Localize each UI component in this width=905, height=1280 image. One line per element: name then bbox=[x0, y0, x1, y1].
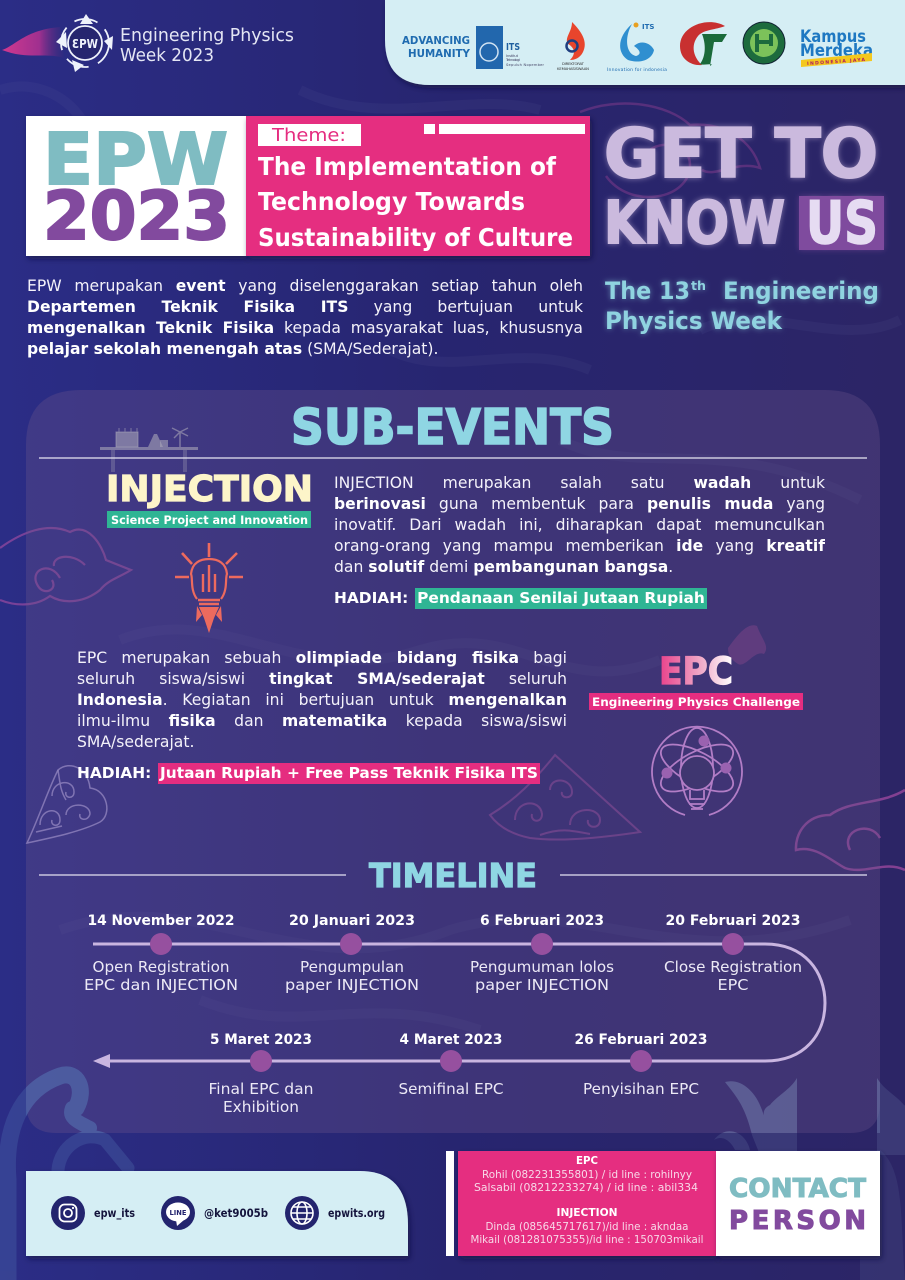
text: EPC contacts: EPC bbox=[576, 1154, 598, 1167]
icon: ITS advancing humanity logo: HUMANITY bbox=[408, 48, 470, 60]
text: theme title: Technology Towards bbox=[258, 187, 525, 216]
milestones: descriptions: Semifinal EPC bbox=[398, 1080, 504, 1098]
heading: Get to know us: GET TO bbox=[604, 115, 878, 194]
text: EPC description: SMA/sederajat. bbox=[77, 733, 194, 751]
decoration: silhouettes inside panel bbox=[7, 1075, 905, 1280]
panel: EPW 2023 title block bbox=[26, 116, 246, 256]
milestones: dates: 20 Januari 2023 bbox=[289, 913, 415, 929]
text: EPW description: mengenalkan Teknik Fisika kepada masyarakat luas, khususnya bbox=[27, 319, 583, 337]
milestones: dates: 26 Februari 2023 bbox=[574, 1032, 708, 1048]
heading: The 13th Engineering Physics Week: Engineering bbox=[723, 277, 879, 305]
text: EPC contacts: Rohil (082231355801) / id line : rohilnyy bbox=[482, 1168, 692, 1181]
callout: EPC prize: HADIAH: bbox=[77, 764, 151, 782]
icon: Direktorat Kemahasiswaan logo: KEMAHASISWAAN bbox=[557, 66, 589, 71]
milestones: dates: 14 November 2022 bbox=[88, 913, 234, 929]
milestones: dates bbox=[88, 913, 800, 1048]
milestones: descriptions: Pengumuman lolos bbox=[470, 958, 614, 976]
icon: laboratory shelf bbox=[100, 428, 198, 472]
milestones: descriptions: Open Registration bbox=[92, 958, 230, 976]
text: EPW description: Departemen Teknik Fisika ITS yang bertujuan untuk bbox=[27, 298, 583, 316]
milestones: descriptions: paper INJECTION bbox=[475, 976, 609, 994]
heading: Get to know us: US bbox=[806, 188, 878, 257]
text: INJECTION description: INJECTION merupakan salah satu wadah untuk bbox=[334, 474, 825, 492]
icon: ITS 61 logo: ITS bbox=[642, 23, 654, 31]
chart: timeline path with milestones bbox=[84, 913, 825, 1116]
heading: EPW: EPW bbox=[43, 118, 228, 201]
heading: The 13th Engineering Physics Week bbox=[605, 277, 879, 335]
icon: ITS advancing humanity logo: ADVANCING bbox=[402, 35, 470, 47]
icon: green emblem bbox=[743, 22, 785, 64]
heading: SUB-EVENTS: SUB-EVENTS bbox=[291, 399, 614, 456]
callout: EPC prize: Jutaan Rupiah + Free Pass Teknik Fisika ITS bbox=[160, 764, 538, 782]
heading: CONTACT PERSON bbox=[729, 1174, 866, 1236]
text: theme title bbox=[258, 152, 573, 252]
icon: EPW logo with swoosh: ƐPW bbox=[72, 37, 98, 51]
icon: GF logo bbox=[680, 22, 727, 66]
panel: sponsor logos bbox=[385, 0, 905, 85]
panel: contact person bbox=[446, 1151, 880, 1256]
milestones: descriptions: Final EPC dan bbox=[208, 1080, 314, 1098]
heading: TIMELINE: TIMELINE bbox=[369, 856, 537, 895]
text: INJECTION description: dan solutif demi pembangunan bangsa. bbox=[334, 558, 673, 576]
milestones: descriptions bbox=[84, 958, 802, 1116]
text: INJECTION description: inovatif. Dari wadah ini, diharapkan dapat memunculkan bbox=[334, 516, 825, 534]
icon: EPW logo with swoosh bbox=[2, 14, 113, 72]
text: INJECTION description: orang-orang yang mampu memberikan ide yang kreatif bbox=[334, 537, 825, 555]
icon: Instagram bbox=[51, 1196, 85, 1230]
callout: INJECTION prize: HADIAH: bbox=[334, 589, 408, 607]
heading: INJECTION bbox=[106, 469, 313, 528]
icon: ITS advancing humanity logo: ITS bbox=[506, 42, 520, 53]
heading: 2023: 2023 bbox=[43, 177, 230, 255]
heading: Get to know us: KNOW bbox=[604, 188, 785, 257]
heading: EPC bbox=[589, 650, 803, 710]
panel: theme bbox=[246, 116, 590, 256]
heading: INJECTION: INJECTION bbox=[106, 469, 313, 510]
milestones: descriptions: paper INJECTION bbox=[285, 976, 419, 994]
panel: sub-events and timeline background bbox=[26, 390, 880, 1133]
icon: ITS advancing humanity logo: Institut bbox=[506, 54, 519, 58]
icon: rocket light bulb bbox=[175, 543, 243, 633]
icon: Kampus Merdeka logo: Kampus bbox=[800, 27, 866, 46]
text: website: epwits.org bbox=[328, 1206, 385, 1220]
milestones: dates: 4 Maret 2023 bbox=[400, 1032, 502, 1048]
text: INJECTION description: berinovasi guna membentuk para penulis muda yang bbox=[334, 495, 825, 513]
icon: LINE: LINE bbox=[170, 1209, 187, 1217]
heading: Engineering Physics Week 2023: Week 2023 bbox=[120, 46, 214, 66]
icon: Kampus Merdeka logo: INDONESIA JAYA bbox=[807, 57, 866, 67]
text: EPW description: EPW merupakan event yang diselenggarakan setiap tahun oleh bbox=[27, 277, 583, 295]
milestones: dates: 6 Februari 2023 bbox=[480, 913, 604, 929]
callout: EPC prize bbox=[77, 763, 540, 784]
callout: INJECTION prize bbox=[334, 588, 707, 609]
text: INJECTION contacts: INJECTION bbox=[556, 1206, 618, 1219]
milestones: dates: 20 Februari 2023 bbox=[666, 913, 800, 929]
milestones: dates: 5 Maret 2023 bbox=[210, 1032, 312, 1048]
text: EPC contacts: Salsabil (08212233274) / id line : abil334 bbox=[474, 1181, 698, 1194]
panel: social media bbox=[26, 1171, 408, 1256]
arrow: timeline line bbox=[93, 944, 825, 1068]
text: INJECTION contacts bbox=[470, 1206, 704, 1246]
milestones: descriptions: Exhibition bbox=[223, 1098, 299, 1116]
text: EPC description: Indonesia. Kegiatan ini bertujuan untuk mengenalkan bbox=[77, 691, 567, 709]
milestones: descriptions: EPC bbox=[718, 976, 748, 994]
icon: ITS advancing humanity logo: Sepuluh Nopember bbox=[506, 63, 545, 67]
text: INJECTION contacts: Dinda (085645717617)/id line : akndaa bbox=[486, 1220, 688, 1233]
panel: theme: Theme: bbox=[271, 125, 346, 146]
milestones: dots bbox=[150, 933, 744, 1072]
heading: CONTACT PERSON: PERSON bbox=[729, 1206, 866, 1236]
label: Engineering Physics Challenge: Engineering Physics Challenge bbox=[592, 695, 800, 709]
heading: Engineering Physics Week 2023: Engineering Physics bbox=[120, 26, 294, 46]
text: Instagram handle: epw_its bbox=[94, 1206, 135, 1221]
callout: INJECTION prize: Pendanaan Senilai Jutaan Rupiah bbox=[417, 589, 705, 607]
icon: website globe bbox=[285, 1196, 319, 1230]
icon: Kampus Merdeka logo bbox=[800, 27, 873, 67]
text: EPC description bbox=[77, 649, 567, 751]
label: Science Project and Innovation: Science Project and Innovation bbox=[111, 513, 308, 527]
text: EPW description bbox=[27, 277, 583, 358]
milestones: descriptions: Pengumpulan bbox=[300, 958, 404, 976]
text: EPC description: ilmu-ilmu fisika dan matematika kepada siswa/siswi bbox=[77, 712, 567, 730]
text: EPW description: pelajar sekolah menengah atas (SMA/Sederajat). bbox=[27, 340, 438, 358]
icon: LINE bbox=[161, 1196, 195, 1230]
text: INJECTION contacts: Mikail (081281075355)/id line : 150703mikail bbox=[470, 1233, 704, 1246]
text: EPC description: seluruh siswa/siswi tingkat SMA/sederajat seluruh bbox=[77, 670, 567, 688]
heading: The 13th Engineering Physics Week: Physics Week bbox=[605, 307, 783, 335]
text: EPC contacts bbox=[474, 1154, 698, 1194]
text: EPC description: EPC merupakan sebuah olimpiade bidang fisika bagi bbox=[77, 649, 567, 667]
text: LINE handle: @ket9005b bbox=[204, 1206, 268, 1220]
icon: Kampus Merdeka logo: Merdeka bbox=[800, 41, 873, 60]
heading: Get to know us bbox=[604, 115, 884, 257]
heading: The 13th Engineering Physics Week: th bbox=[691, 279, 706, 293]
text: INJECTION description bbox=[334, 474, 825, 576]
icon: ITS 61 logo bbox=[607, 22, 667, 73]
icon: ITS advancing humanity logo bbox=[402, 26, 545, 69]
icon: Direktorat Kemahasiswaan logo bbox=[557, 22, 589, 71]
heading: The 13th Engineering Physics Week: The 13 bbox=[605, 277, 690, 305]
milestones: descriptions: Close Registration bbox=[664, 958, 802, 976]
icon: atom light bulb bbox=[652, 727, 742, 815]
icon: ITS advancing humanity logo: Teknologi bbox=[505, 58, 520, 62]
text: theme title: The Implementation of bbox=[258, 152, 557, 181]
heading: CONTACT PERSON: CONTACT bbox=[729, 1174, 866, 1204]
milestones: descriptions: EPC dan INJECTION bbox=[84, 976, 238, 994]
milestones: descriptions: Penyisihan EPC bbox=[583, 1080, 699, 1098]
heading: EPC: EPC bbox=[659, 650, 733, 693]
icon: Direktorat Kemahasiswaan logo: DIREKTORAT bbox=[562, 61, 585, 66]
icon: ITS 61 logo: Innovation for indonesia bbox=[607, 67, 667, 73]
text: theme title: Sustainability of Culture bbox=[258, 223, 573, 252]
heading: Engineering Physics Week 2023 bbox=[120, 26, 294, 66]
